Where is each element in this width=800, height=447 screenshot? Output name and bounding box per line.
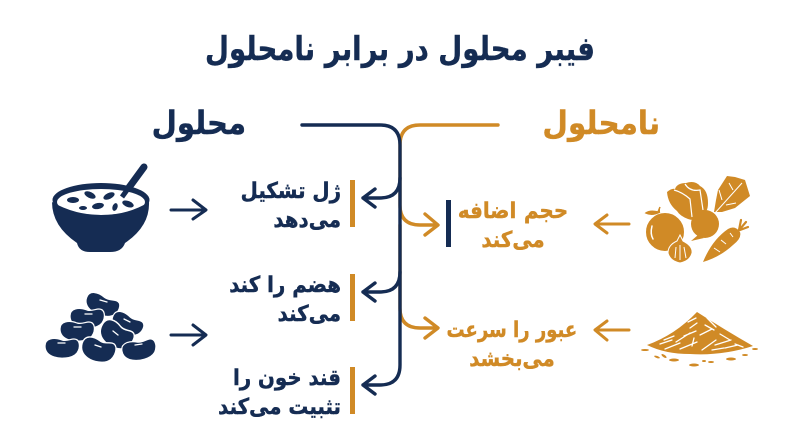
- bar: blood sugar: [350, 367, 355, 414]
- text: speeds transit: عبور را سرعت: [447, 318, 577, 343]
- heading: insoluble: نامحلول: [542, 104, 660, 142]
- text: forms gel: ژل تشکیل: [241, 179, 341, 204]
- text: stabilizes blood sugar: [218, 366, 341, 420]
- heading: soluble: محلول: [152, 104, 246, 142]
- text: adds bulk: [458, 199, 568, 253]
- bar: gel: [350, 180, 355, 227]
- text: stabilizes blood sugar: قند خون را: [233, 366, 341, 391]
- text: adds bulk: حجم اضافه: [458, 199, 568, 224]
- text: speeds transit: می‌بخشد: [469, 347, 555, 372]
- text: slows digestion: می‌کند: [278, 302, 341, 327]
- text: slows digestion: هضم را کند: [229, 273, 341, 298]
- bar: adds bulk: [446, 200, 451, 247]
- text: speeds transit: [447, 318, 577, 372]
- text: forms gel: [241, 179, 341, 233]
- bar: digestion: [350, 274, 355, 321]
- text: forms gel: می‌دهد: [273, 208, 341, 233]
- text: stabilizes blood sugar: تثبیت می‌کند: [218, 395, 341, 420]
- text: slows digestion: [229, 273, 341, 327]
- text: adds bulk: می‌کند: [481, 228, 545, 253]
- title: فیبر محلول در برابر نامحلول: [205, 29, 595, 68]
